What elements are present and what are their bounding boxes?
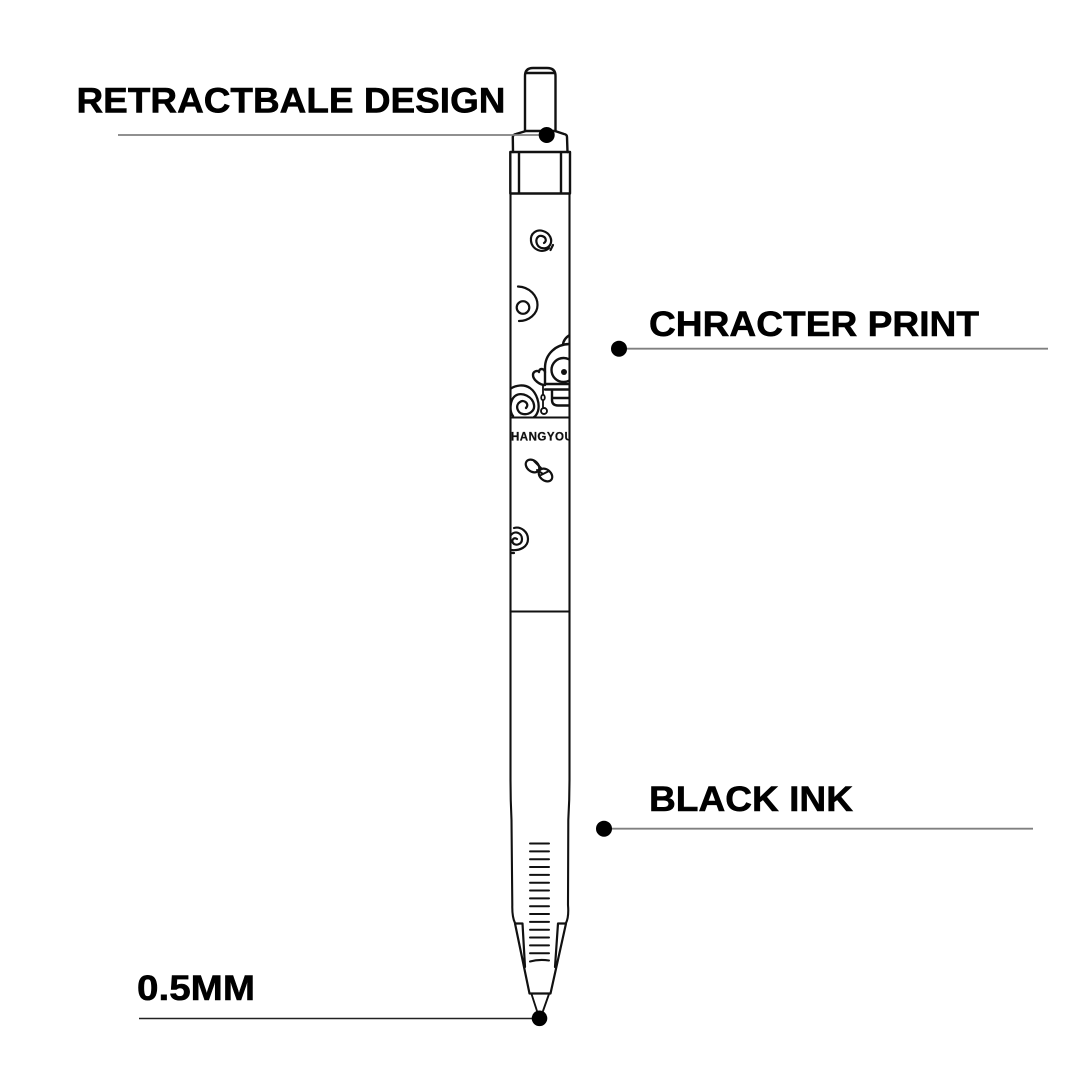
printed barrel xyxy=(510,194,576,612)
print: circle and arc xyxy=(517,286,538,321)
leader line xyxy=(619,348,1048,350)
print: spiral top xyxy=(531,230,553,251)
print: beetle xyxy=(523,457,555,484)
marker dot xyxy=(611,341,627,357)
callout: black ink xyxy=(596,780,1033,837)
pen clip section xyxy=(510,152,570,194)
leader line xyxy=(118,134,547,136)
print: HANGYOU wordmark: HANGYOU xyxy=(511,432,573,444)
callout: tip size xyxy=(137,969,547,1026)
character head xyxy=(545,335,570,384)
marker dot xyxy=(532,1010,547,1026)
heading: character print: CHRACTER PRINT xyxy=(649,305,979,344)
character heart hand xyxy=(533,369,545,385)
leader line xyxy=(139,1018,540,1020)
grip barrel xyxy=(510,612,570,923)
print: spiral lower xyxy=(511,528,528,553)
character chain xyxy=(541,386,547,414)
heading: retractable design: RETRACTBALE DESIGN xyxy=(76,82,506,121)
snail xyxy=(510,385,539,417)
marker dot xyxy=(539,127,555,143)
print: character xyxy=(512,334,568,416)
pen illustration xyxy=(510,68,576,1011)
heading: 0.5mm: 0.5MM xyxy=(137,969,255,1008)
callout: retractable design xyxy=(76,82,555,143)
pen tip xyxy=(532,994,549,1011)
character body xyxy=(545,390,570,406)
pen nose cone xyxy=(515,924,566,994)
leader line xyxy=(604,828,1033,830)
marker dot xyxy=(596,821,612,837)
pen collar xyxy=(513,131,568,152)
grip ridges xyxy=(530,844,549,962)
heading: black ink: BLACK INK xyxy=(649,780,853,819)
pen push button xyxy=(525,68,556,131)
character eye xyxy=(550,356,568,383)
callout: character print xyxy=(611,305,1048,357)
